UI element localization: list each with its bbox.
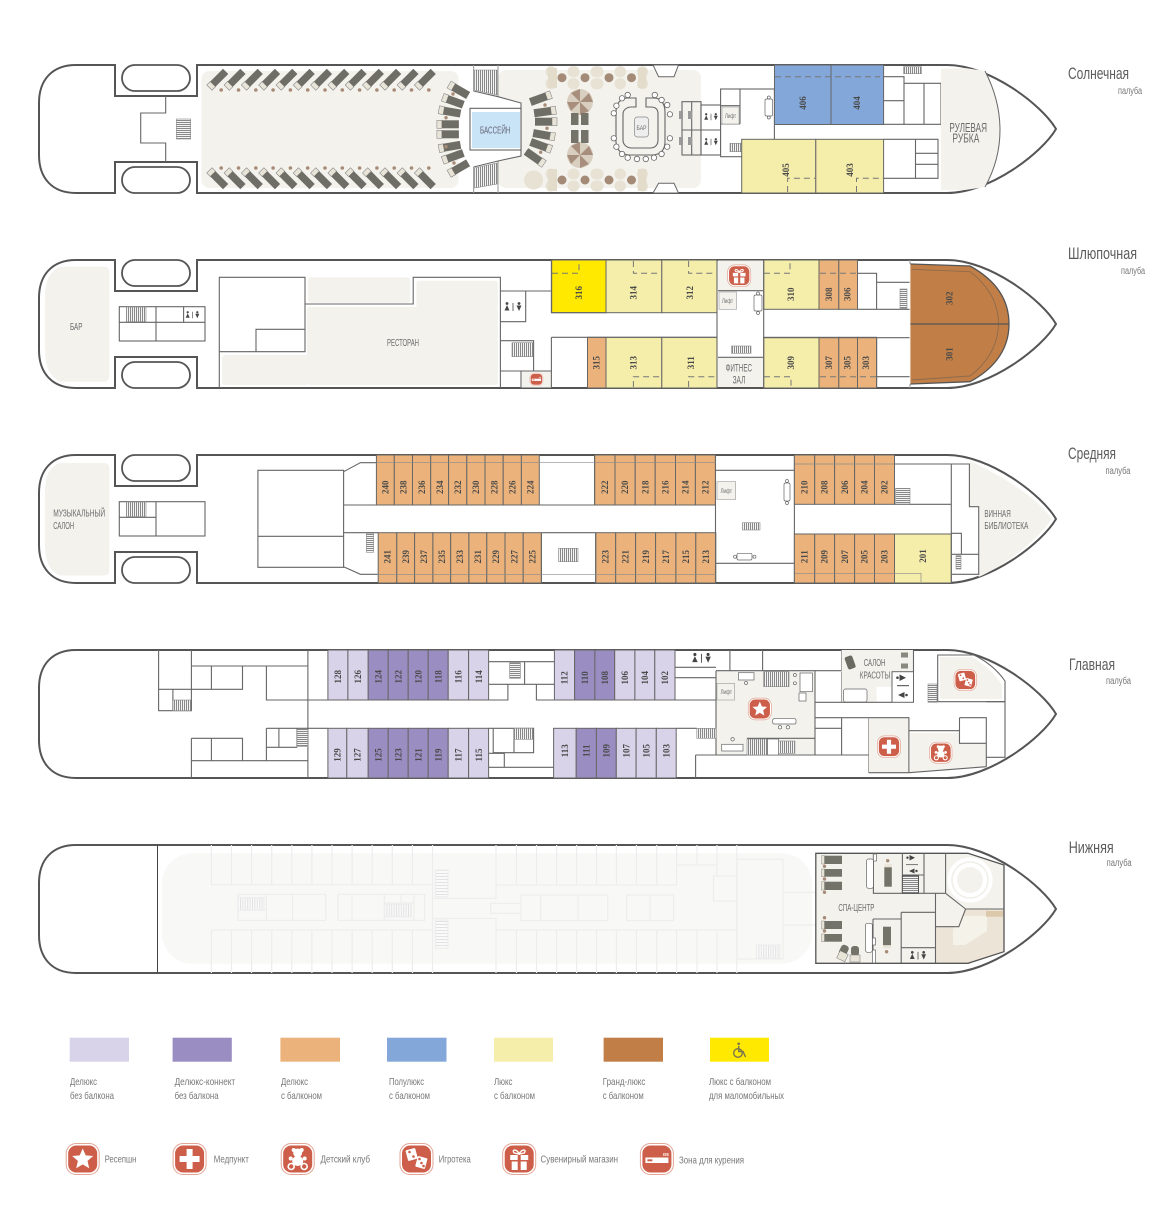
lift: Лифт (720, 690, 732, 696)
deck: middle (39, 455, 1056, 583)
wine library: БИБЛИОТЕКА (984, 520, 1028, 532)
cabins 213-223: 215 (681, 549, 691, 563)
cabins 114-128: 126 (353, 669, 363, 683)
deck hatches (653, 65, 678, 193)
deck: sun (39, 65, 1056, 193)
stairs aft (173, 700, 308, 747)
engine room bulkhead (156, 845, 158, 973)
heading: middle deck (1068, 445, 1131, 477)
cabins 224-240: 234 (435, 480, 445, 494)
cabin 201: 201 (918, 549, 928, 563)
legend item: medical: Медпункт (214, 1154, 249, 1166)
cabins 225-241: 225 (527, 549, 537, 563)
wine library (969, 461, 1052, 577)
cafe tables dark (571, 113, 588, 143)
reception floor (716, 671, 815, 755)
aft service block (119, 502, 205, 536)
bow rooms (894, 464, 979, 583)
heading: middle deck: палуба (1106, 465, 1131, 477)
hull outline (39, 650, 1056, 778)
icon: WC (504, 302, 522, 311)
cabins 225-241: 231 (473, 549, 483, 563)
cabins 224-240: 236 (417, 480, 427, 494)
hull outline (39, 65, 1056, 193)
cabins lower row: 311 (686, 356, 696, 369)
cabins 115-129: 117 (454, 748, 464, 762)
cabins 224-240 (376, 455, 539, 505)
cabins lower row: 313 (629, 355, 639, 369)
cabins 213-223: 219 (641, 549, 651, 563)
closed area floor (162, 853, 812, 964)
fitness hall: ФИТНЕС (726, 363, 752, 375)
stairs bow (896, 488, 961, 569)
spa chairs (837, 944, 860, 962)
cabins 115-129: 115 (474, 748, 484, 762)
cabins 114-128: 118 (433, 670, 443, 683)
cafe tables bottom (524, 168, 648, 192)
restaurant label: РЕСТОРАН (387, 337, 419, 349)
cabins 213-223: 221 (621, 549, 631, 563)
swatch: junior suite: с балконом (389, 1090, 430, 1102)
cabins 202-210: 202 (880, 480, 890, 494)
wheelhouse (941, 68, 1000, 190)
cabin 403 (816, 139, 884, 193)
heading: sun deck (1068, 65, 1142, 97)
cabins 224-240: 224 (525, 480, 535, 494)
music salon: САЛОН (53, 520, 74, 532)
swatch: suite (494, 1038, 553, 1102)
heading: boat deck: палуба (1121, 265, 1145, 277)
central lift lobby (539, 455, 794, 583)
aft loungers bottom row (207, 166, 436, 189)
music salon (45, 463, 109, 576)
lift (719, 292, 736, 309)
closed area plan (211, 845, 816, 973)
cabins 103-113 (554, 728, 676, 778)
swatch: deluxe with balcony (280, 1038, 340, 1102)
wheelhouse: РУЛЕВАЯ (949, 121, 987, 135)
pool: БАССЕЙН (480, 124, 510, 136)
cabins 114-128: 124 (373, 669, 383, 683)
legend item: souvenir shop (503, 1144, 618, 1174)
cabins 103-113: 111 (581, 744, 591, 757)
spa walls (816, 853, 1004, 963)
stairs bow (928, 684, 937, 702)
cabins lower row: 303 (861, 355, 871, 369)
cabins 114-128: 128 (333, 669, 343, 683)
fitness hall: ЗАЛ (733, 374, 745, 386)
smoking floor (522, 372, 552, 388)
icon: WC (692, 653, 711, 663)
stairs (512, 343, 533, 357)
wheelhouse: РУБКА (952, 132, 980, 146)
cabins 202-210 (794, 455, 894, 504)
heading: middle deck: Средняя (1068, 445, 1116, 463)
lift hall: Лифт (725, 114, 736, 120)
second deck floor (498, 70, 701, 188)
cabins 203-211: 209 (820, 549, 830, 563)
cabins 224-240: 230 (471, 480, 481, 494)
deck: lower (39, 845, 1056, 973)
swatch: junior suite (387, 1038, 446, 1102)
pool surround and stairs (474, 65, 521, 193)
cabins 212-222: 212 (701, 480, 711, 494)
jacuzzi (947, 857, 993, 903)
swatch: deluxe connecting (173, 1038, 235, 1102)
cabins 102-112: 112 (560, 671, 570, 684)
heading: main deck: палуба (1106, 675, 1131, 687)
bar counter: БАР (636, 126, 646, 132)
cabins 225-241: 229 (491, 549, 501, 563)
cabins upper row: 312 (685, 285, 695, 299)
swatch: junior suite: Полулюкс (389, 1076, 424, 1088)
cabins 202-210: 206 (840, 480, 850, 494)
cabins 115-129: 127 (353, 748, 363, 762)
cabins 115-129: 123 (393, 748, 403, 762)
aft walls (159, 650, 308, 778)
icons: WC spa (906, 855, 926, 960)
cabins 114-128 (328, 650, 489, 700)
cabins 212-222: 218 (641, 480, 651, 494)
cabins 203-211 (794, 534, 894, 583)
cabin 405: 405 (781, 163, 791, 177)
loungers around pool, bow side (524, 91, 557, 167)
aft deck walls (141, 96, 166, 162)
legend: cabin types (70, 1038, 785, 1102)
swatch: deluxe without balcony: Делюкс (70, 1076, 97, 1088)
spa couches (822, 856, 892, 953)
cabins 225-241 (378, 533, 541, 583)
loungers around pool, aft side (437, 81, 470, 177)
legend item: kids club (281, 1144, 370, 1174)
heading: sun deck: Солнечная (1068, 65, 1129, 83)
cabins 102-112: 110 (580, 671, 590, 684)
mid walls (308, 662, 554, 767)
cabins 115-129: 129 (332, 748, 342, 762)
cabins 114-128: 114 (474, 670, 484, 683)
swatch: grand suite: с балконом (603, 1090, 644, 1102)
restaurant floor (222, 277, 498, 385)
cabins 224-240: 232 (453, 480, 463, 494)
stairs (697, 728, 716, 738)
medical room (869, 718, 909, 773)
balcony line (775, 76, 880, 78)
souvenir shop (718, 260, 763, 291)
cabins 102-112 (554, 650, 675, 700)
central hall walls (258, 463, 378, 574)
cabins 212-222 (595, 455, 715, 505)
legend item: reception: Ресепшн (105, 1154, 136, 1166)
cabins 213-223 (596, 533, 716, 583)
cabins 102-112: 102 (660, 670, 670, 684)
corridor walls (551, 260, 910, 388)
heading: lower deck: Нижняя (1069, 839, 1114, 857)
cabin 406 (774, 65, 831, 124)
deck: boat (39, 260, 1056, 388)
heading: main deck: Главная (1069, 656, 1115, 674)
balcony lines (377, 463, 921, 582)
cabins 103-113: 113 (560, 744, 570, 757)
swatch: deluxe connecting: Делюкс-коннект (175, 1076, 235, 1088)
icon: reception (748, 698, 771, 720)
cabins 225-241: 227 (509, 549, 519, 563)
cabins 213-223: 217 (661, 549, 671, 563)
cabins 114-128: 122 (393, 669, 403, 683)
sofa (754, 292, 762, 314)
cabins 102-112: 108 (600, 670, 610, 684)
service block (679, 102, 721, 155)
legend: facilities (66, 1144, 744, 1174)
cabins 213-223: 213 (701, 549, 711, 563)
bar counter (616, 98, 665, 155)
cabins 225-241: 235 (437, 549, 447, 563)
hull outline (39, 260, 1056, 388)
stairs dark (902, 876, 918, 893)
cabins 114-128: 120 (413, 669, 423, 683)
cabins 102-112: 104 (640, 670, 650, 684)
cabins upper row: 306 (843, 287, 853, 301)
swatch: deluxe without balcony: без балкона (70, 1090, 114, 1102)
cabins 224-240: 238 (399, 480, 409, 494)
cabins 202-210: 210 (799, 480, 809, 494)
cabins 114-128: 116 (454, 670, 464, 683)
game room (938, 655, 1005, 702)
bar floor: БАР (70, 321, 82, 333)
hull outline (39, 845, 1056, 973)
swatch: accessible suite: Люкс с балконом (709, 1076, 771, 1088)
wine library: ВИННАЯ (984, 508, 1011, 520)
kids club (910, 733, 986, 773)
legend item: medical (173, 1144, 249, 1174)
sun deck floor (201, 71, 459, 188)
heading: main deck (1069, 656, 1131, 687)
cabins lower row: 307 (824, 355, 834, 369)
heading: boat deck: Шлюпочная (1068, 245, 1137, 263)
heading: boat deck (1068, 245, 1145, 277)
music salon: МУЗЫКАЛЬНЫЙ (53, 507, 105, 520)
bar floor (45, 267, 109, 382)
cabins 202-210: 204 (860, 480, 870, 494)
cabins 103-113: 107 (621, 743, 631, 757)
swatch: suite: Люкс (494, 1076, 512, 1088)
beauty salon: САЛОН (864, 657, 886, 669)
cabins 212-222: 222 (600, 480, 610, 494)
legend item: kids club: Детский клуб (320, 1154, 370, 1166)
swatch: accessible suite: для маломобильных (709, 1090, 785, 1102)
stairs aft (176, 119, 191, 139)
central lift lobby: Лифт (720, 489, 732, 495)
grand suites 301 302: 302 (944, 291, 954, 305)
heading: sun deck: палуба (1118, 85, 1142, 97)
cabins lower row (588, 337, 877, 388)
swatch: deluxe with balcony: Делюкс (281, 1076, 308, 1088)
cabins lower row: 305 (843, 355, 853, 369)
spa sofas (866, 854, 876, 963)
aft service block (119, 307, 205, 341)
cabins 212-222: 216 (661, 480, 671, 494)
heading: lower deck: палуба (1107, 857, 1132, 869)
cabin 404: 404 (852, 96, 862, 110)
swatch: grand suite (603, 1038, 663, 1102)
cabins 103-113: 103 (661, 743, 671, 757)
spa label: СПА-ЦЕНТР (838, 902, 874, 914)
bar stools (611, 92, 673, 162)
heading: lower deck (1069, 839, 1132, 869)
legend item: game room: Игротека (439, 1154, 471, 1166)
lift: Лифт (722, 299, 733, 305)
grand suites 301 302: 301 (944, 347, 954, 361)
cabins 103-113: 109 (601, 743, 611, 757)
reception furniture (722, 672, 815, 755)
swatch: grand suite: Гранд-люкс (603, 1076, 645, 1088)
cabins upper row: 314 (629, 285, 639, 299)
swatch: deluxe connecting: без балкона (175, 1090, 219, 1102)
cabin 405 (742, 139, 816, 193)
cabins 225-241: 233 (455, 549, 465, 563)
deck: main (39, 650, 1056, 778)
stairs mid (559, 548, 578, 562)
cabins 115-129 (328, 728, 489, 778)
legend item: smoking area (640, 1144, 744, 1174)
cabins 115-129: 121 (413, 748, 423, 762)
cabins 203-211: 207 (840, 549, 850, 563)
swatch: deluxe with balcony: с балконом (281, 1090, 322, 1102)
cabin 406: 406 (798, 96, 808, 110)
lift hall (721, 89, 774, 157)
legend item: souvenir shop: Сувенирный магазин (540, 1154, 618, 1166)
cabins 225-241: 239 (401, 549, 411, 563)
pool area (936, 909, 1004, 963)
cabins 115-129: 125 (373, 748, 383, 762)
lift (717, 683, 735, 700)
stairs bow (900, 289, 907, 308)
spa floor (816, 853, 1004, 963)
cabins 202-210: 208 (820, 480, 830, 494)
cafe tables top (546, 66, 648, 89)
stairs bow (904, 67, 922, 74)
cabins 224-240: 228 (489, 480, 499, 494)
beauty salon (842, 650, 914, 703)
aft loungers top row (207, 69, 436, 92)
cabins upper row: 310 (786, 287, 796, 301)
cabins 103-113: 105 (641, 743, 651, 757)
forward walls (675, 650, 869, 778)
cabins 102-112: 106 (620, 670, 630, 684)
stairs (366, 533, 374, 552)
cabin 404 (831, 65, 884, 124)
cabins 225-241: 241 (383, 549, 393, 563)
bow side rooms (884, 77, 941, 178)
cabins lower row: 309 (786, 355, 796, 369)
service rooms (500, 291, 551, 388)
cabins 203-211: 203 (880, 549, 890, 563)
beauty salon: КРАСОТЫ (860, 669, 890, 681)
stairs (731, 346, 751, 353)
cabins lower row: 315 (592, 355, 602, 369)
cabins 224-240: 226 (507, 480, 517, 494)
restaurant walls (219, 277, 500, 388)
umbrellas (567, 89, 593, 168)
cabins 212-222: 220 (620, 480, 630, 494)
pool (470, 108, 521, 150)
cabins 225-241: 237 (419, 549, 429, 563)
cabins 224-240: 240 (381, 480, 391, 494)
bow divider (909, 260, 911, 388)
cabins 213-223: 223 (601, 549, 611, 563)
stairs mid (510, 663, 533, 739)
cabin 201 (894, 534, 951, 583)
fitness hall (718, 357, 763, 387)
hull outline (39, 455, 1056, 583)
legend item: game room (400, 1144, 471, 1174)
grand suites 301 302 (910, 264, 1009, 384)
cabin 403: 403 (845, 163, 855, 177)
balcony lines (552, 261, 876, 387)
cabins upper row: 308 (824, 287, 834, 301)
swatch: accessible suite (709, 1038, 785, 1102)
swatch: suite: с балконом (494, 1090, 535, 1102)
cabins 115-129: 119 (433, 748, 443, 762)
cabins 203-211: 211 (799, 550, 809, 563)
icon: smoking (530, 373, 543, 386)
cabins upper row: 316 (574, 285, 584, 299)
bow walls (869, 702, 1005, 773)
legend item: smoking area: Зона для курения (679, 1154, 744, 1166)
cafe screens (548, 68, 646, 191)
legend item: reception (66, 1144, 136, 1174)
cabins 212-222: 214 (681, 480, 691, 494)
cabins 203-211: 205 (860, 549, 870, 563)
swatch: deluxe without balcony (70, 1038, 129, 1102)
cabins upper row (552, 260, 858, 313)
